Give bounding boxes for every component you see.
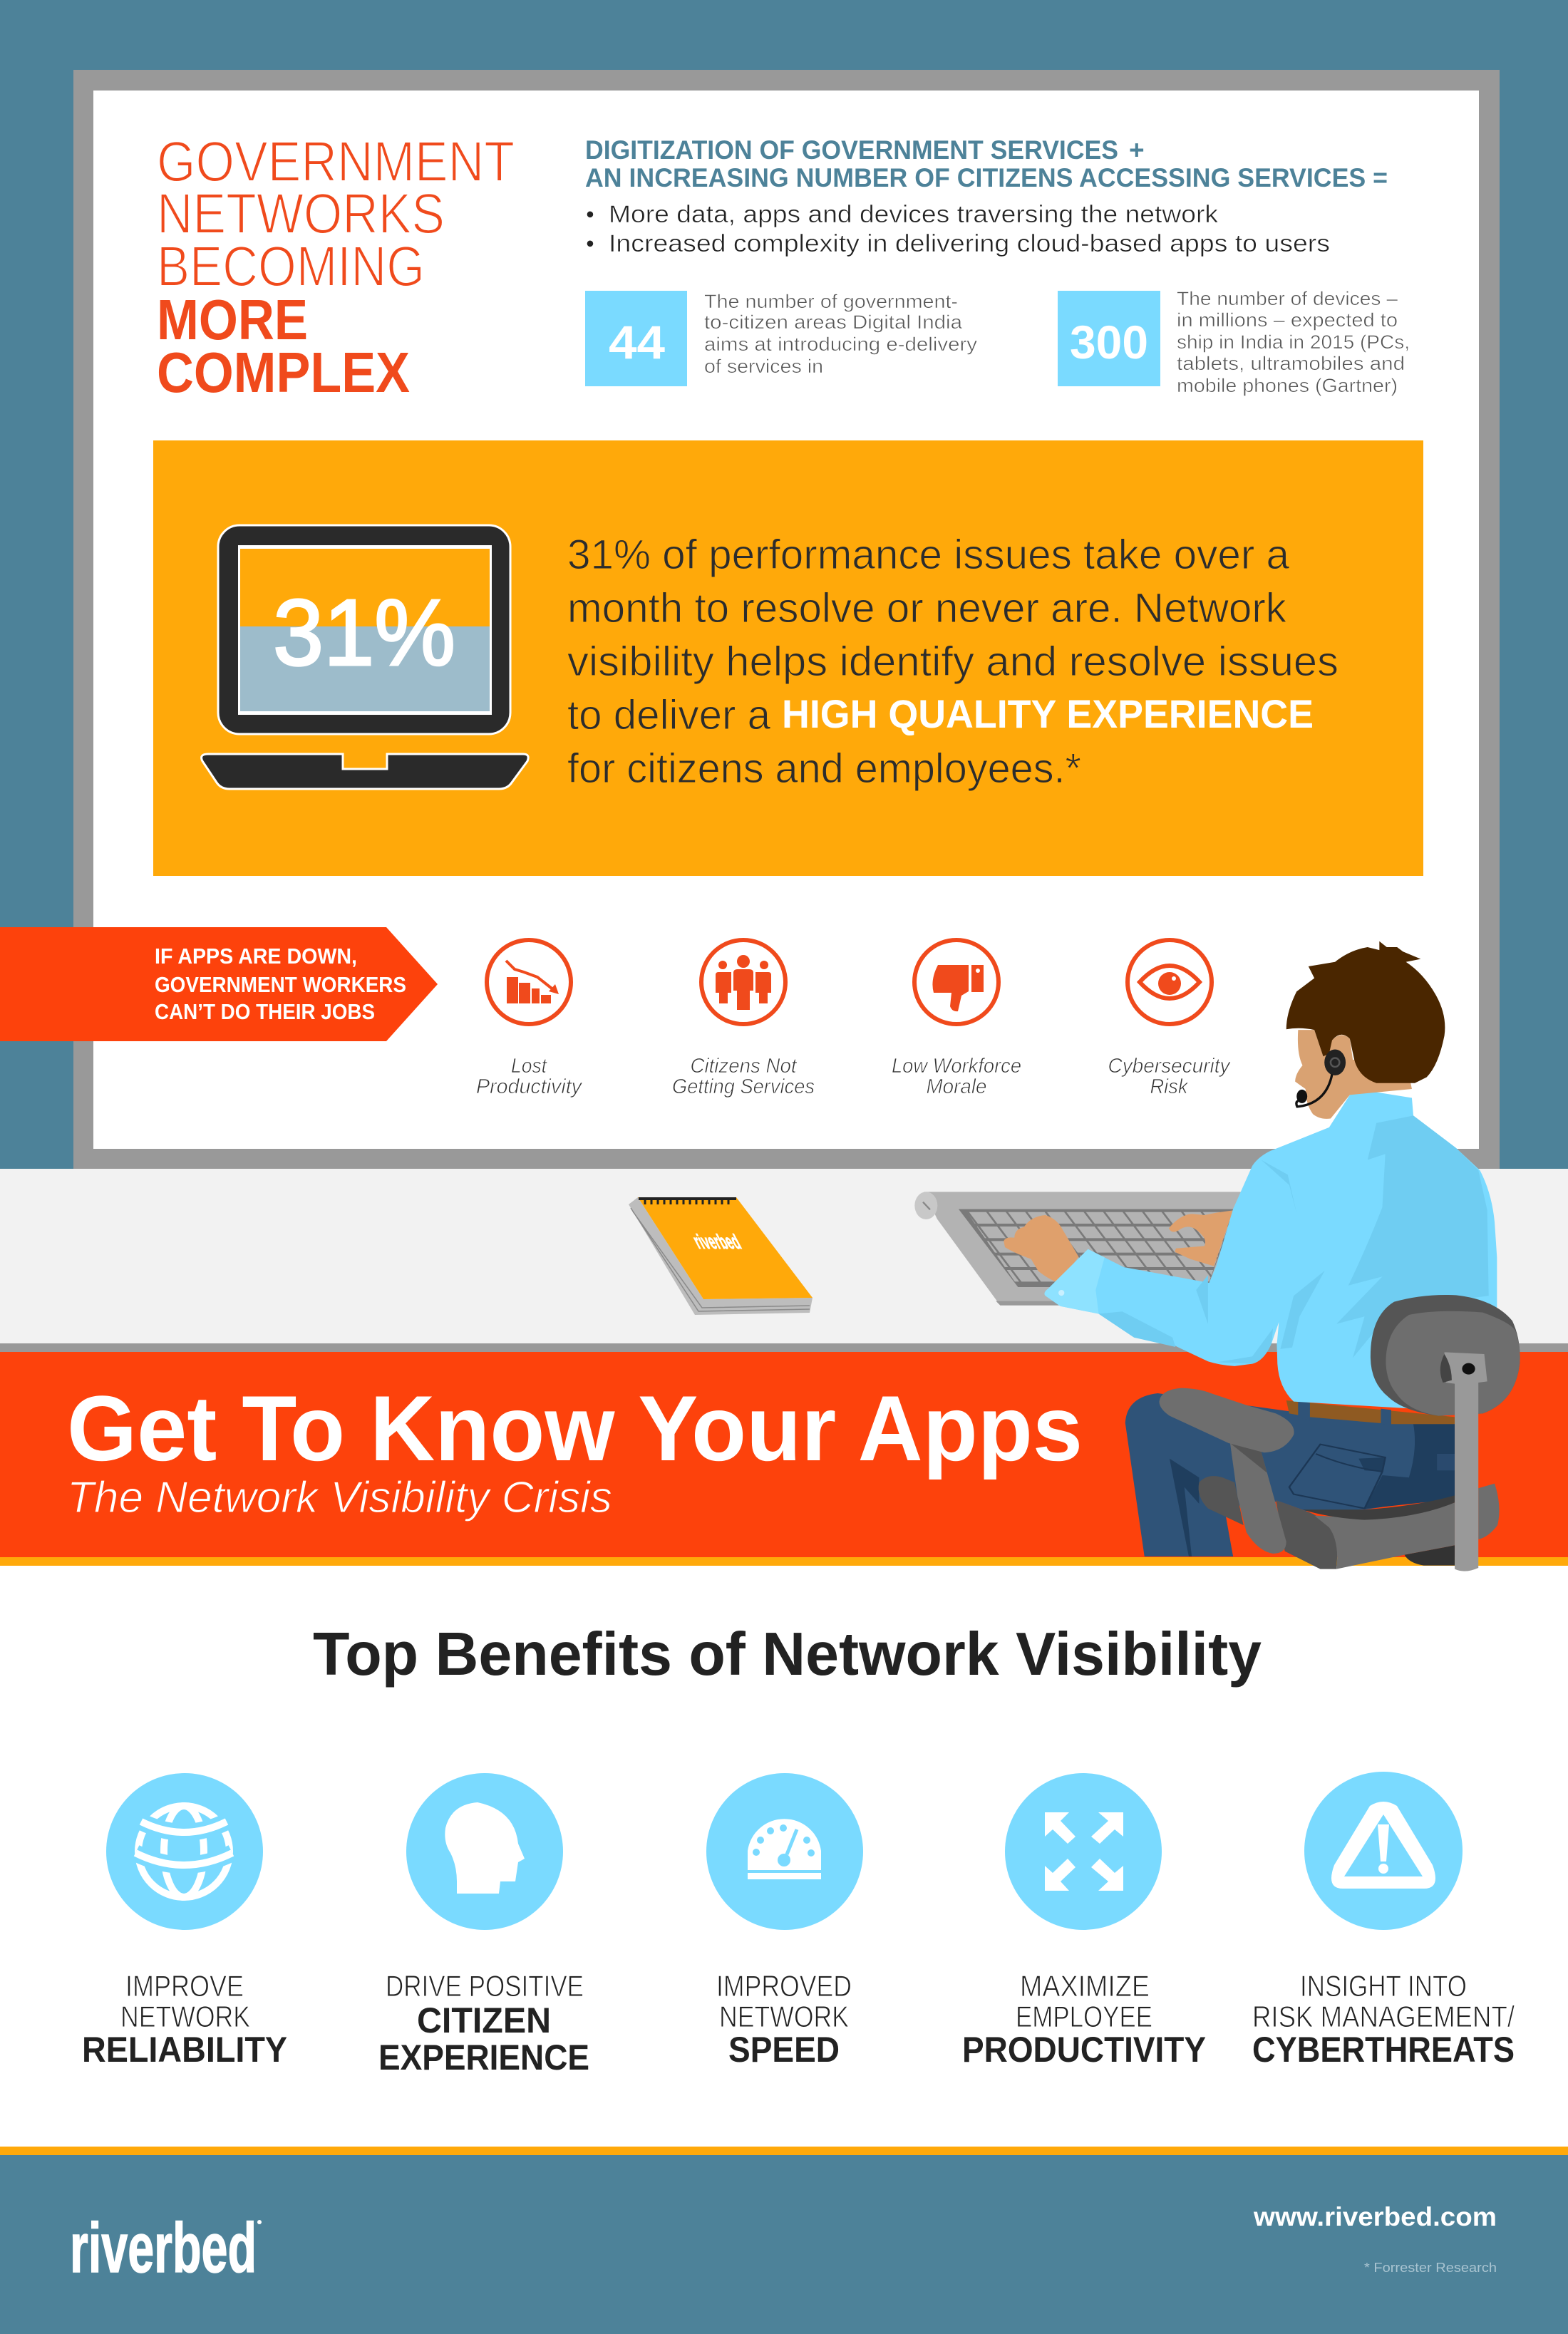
callout text: to deliver a bbox=[567, 692, 771, 738]
icon: laptop with 31%: 31% bbox=[273, 580, 455, 685]
footer bbox=[0, 2147, 1568, 2334]
label: low workforce morale: Morale bbox=[927, 1075, 986, 1098]
stat: 44: The number of government- bbox=[704, 291, 958, 312]
desk surface bbox=[0, 1169, 1568, 1345]
label: citizens not getting services bbox=[672, 1055, 815, 1098]
label: lost productivity bbox=[476, 1055, 582, 1098]
arrow: if apps are down bbox=[0, 927, 438, 1041]
heading: government networks becoming more complex bbox=[157, 130, 515, 404]
banner underline bbox=[0, 1557, 1568, 1566]
stat: 44 bbox=[585, 291, 978, 386]
riverbed logo bbox=[70, 2209, 262, 2287]
benefit: citizen experience: DRIVE POSITIVE bbox=[386, 1969, 584, 2003]
benefit: employee productivity: PRODUCTIVITY bbox=[962, 2030, 1206, 2070]
subtitle: the network visibility crisis: The Network Visibility Crisis bbox=[67, 1473, 612, 1522]
hands bbox=[1004, 1210, 1233, 1283]
title banner background bbox=[0, 1352, 1568, 1557]
stat: 300 bbox=[1058, 288, 1410, 396]
icon: eye bbox=[1128, 940, 1212, 1024]
sub-heading: digitization equation bbox=[585, 135, 1388, 192]
benefit: employee productivity: MAXIMIZE bbox=[1020, 1969, 1150, 2003]
bullet list: • bbox=[586, 201, 594, 228]
label: citizens not getting services: Citizens Not bbox=[690, 1055, 798, 1078]
stat: 300: tablets, ultramobiles and bbox=[1177, 353, 1405, 374]
icon: laptop with 31% bbox=[202, 525, 528, 789]
heading: government networks becoming more complex: MORE bbox=[157, 288, 308, 351]
arrow: if apps are down: IF APPS ARE DOWN, bbox=[155, 944, 357, 969]
benefit: citizen experience bbox=[378, 1773, 589, 2077]
bullet list: More data, apps and devices traversing the network bbox=[609, 201, 1219, 228]
stat: 300: in millions – expected to bbox=[1177, 309, 1398, 331]
sub-heading: digitization equation: AN INCREASING NUMBER OF CITIZENS ACCESSING SERVICES = bbox=[585, 163, 1388, 192]
benefit: citizen experience: CITIZEN bbox=[417, 2000, 551, 2040]
benefit: network reliability: IMPROVE bbox=[125, 1969, 244, 2003]
bullet list: • bbox=[586, 230, 594, 257]
benefit: network reliability: RELIABILITY bbox=[82, 2030, 287, 2070]
office chair bbox=[1159, 1295, 1520, 1571]
seated worker shirt bbox=[1044, 1090, 1497, 1411]
label: cybersecurity risk: Risk bbox=[1150, 1075, 1189, 1098]
label: low workforce morale bbox=[892, 1055, 1021, 1098]
label: lost productivity: Lost bbox=[511, 1055, 548, 1078]
label: cybersecurity risk bbox=[1108, 1055, 1231, 1098]
title: get to know your apps: Get To Know Your Apps bbox=[67, 1376, 1083, 1480]
label: lost productivity: Productivity bbox=[476, 1075, 582, 1098]
benefit: citizen experience: EXPERIENCE bbox=[378, 2038, 589, 2077]
sub-heading: digitization equation: + bbox=[1129, 135, 1145, 165]
stat: 44: aims at introducing e-delivery bbox=[704, 334, 978, 355]
label: low workforce morale: Low Workforce bbox=[892, 1055, 1021, 1078]
arrow: if apps are down: CAN’T DO THEIR JOBS bbox=[155, 999, 375, 1024]
icon: thumbs down bbox=[914, 940, 999, 1024]
icon: head silhouette bbox=[406, 1773, 563, 1930]
bullet list: Increased complexity in delivering cloud-based apps to users bbox=[609, 230, 1330, 257]
benefit: network speed bbox=[706, 1773, 863, 2070]
callout text bbox=[567, 532, 1339, 792]
icon: warning triangle bbox=[1304, 1772, 1463, 1930]
benefit: risk management bbox=[1252, 1772, 1515, 2070]
panel: 31% callout bbox=[153, 440, 1423, 876]
stat: 300: The number of devices – bbox=[1177, 288, 1398, 309]
bullet list bbox=[586, 201, 1330, 257]
icon: gauge bbox=[706, 1773, 863, 1930]
stat: 44: of services in bbox=[704, 356, 823, 377]
benefit: network speed: SPEED bbox=[728, 2030, 840, 2070]
callout text: 31% of performance issues take over a bbox=[567, 532, 1290, 578]
benefit: network reliability: NETWORK bbox=[120, 2000, 250, 2033]
monitor frame bbox=[73, 70, 1500, 1169]
stat: 300: ship in India in 2015 (PCs, bbox=[1177, 331, 1410, 353]
riverbed logo: riverbed bbox=[70, 2209, 257, 2287]
benefit: risk management: RISK MANAGEMENT/ bbox=[1252, 2000, 1515, 2033]
icon: expand arrows bbox=[1005, 1773, 1162, 1930]
desk edge bbox=[0, 1343, 1568, 1352]
stat: 300: mobile phones (Gartner) bbox=[1177, 375, 1398, 396]
icon: citizens bbox=[701, 940, 785, 1024]
callout text: for citizens and employees.* bbox=[567, 745, 1081, 792]
head bbox=[1286, 941, 1445, 1119]
benefit: employee productivity: EMPLOYEE bbox=[1016, 2000, 1152, 2033]
sub-heading: digitization equation: DIGITIZATION OF GOVERNMENT SERVICES bbox=[585, 135, 1118, 165]
benefit: network speed: NETWORK bbox=[719, 2000, 849, 2033]
stat: 44: to-citizen areas Digital India bbox=[704, 311, 963, 333]
monitor screen bbox=[93, 91, 1479, 1149]
monitor background wall bbox=[0, 0, 1568, 1169]
source note: * Forrester Research bbox=[1364, 2261, 1497, 2275]
heading: government networks becoming more complex: BECOMING bbox=[157, 234, 425, 298]
heading: government networks becoming more complex: GOVERNMENT bbox=[157, 130, 515, 193]
label: cybersecurity risk: Cybersecurity bbox=[1108, 1055, 1231, 1078]
benefit: employee productivity bbox=[962, 1773, 1206, 2070]
heading: top benefits: Top Benefits of Network Visibility bbox=[313, 1621, 1262, 1688]
website: www.riverbed.com bbox=[1253, 2202, 1497, 2231]
callout text: visibility helps identify and resolve issues bbox=[567, 639, 1339, 685]
arrow: if apps are down: GOVERNMENT WORKERS bbox=[155, 972, 406, 997]
headset bbox=[1296, 1049, 1346, 1107]
benefit: risk management: INSIGHT INTO bbox=[1300, 1969, 1467, 2003]
icon: notebook bbox=[629, 1197, 813, 1315]
icon: globe bbox=[106, 1773, 263, 1930]
icon: lost productivity bbox=[487, 940, 571, 1024]
keyboard bbox=[914, 1192, 1247, 1306]
callout text: month to resolve or never are. Network bbox=[567, 585, 1287, 631]
benefit: network speed: IMPROVED bbox=[716, 1969, 852, 2003]
illustration: worker at keyboard bbox=[914, 941, 1520, 1571]
heading: government networks becoming more complex: NETWORKS bbox=[157, 182, 445, 245]
benefit: risk management: CYBERTHREATS bbox=[1252, 2030, 1515, 2070]
stat: 300: 300 bbox=[1070, 316, 1148, 368]
callout text: HIGH QUALITY EXPERIENCE bbox=[782, 691, 1314, 736]
heading: government networks becoming more complex: COMPLEX bbox=[157, 341, 410, 404]
stat: 44: 44 bbox=[609, 316, 665, 368]
label: citizens not getting services: Getting Services bbox=[672, 1075, 815, 1098]
benefit: network reliability bbox=[82, 1773, 287, 2070]
icon: notebook: riverbed bbox=[688, 1230, 745, 1253]
jeans and belt bbox=[1125, 1393, 1455, 1556]
